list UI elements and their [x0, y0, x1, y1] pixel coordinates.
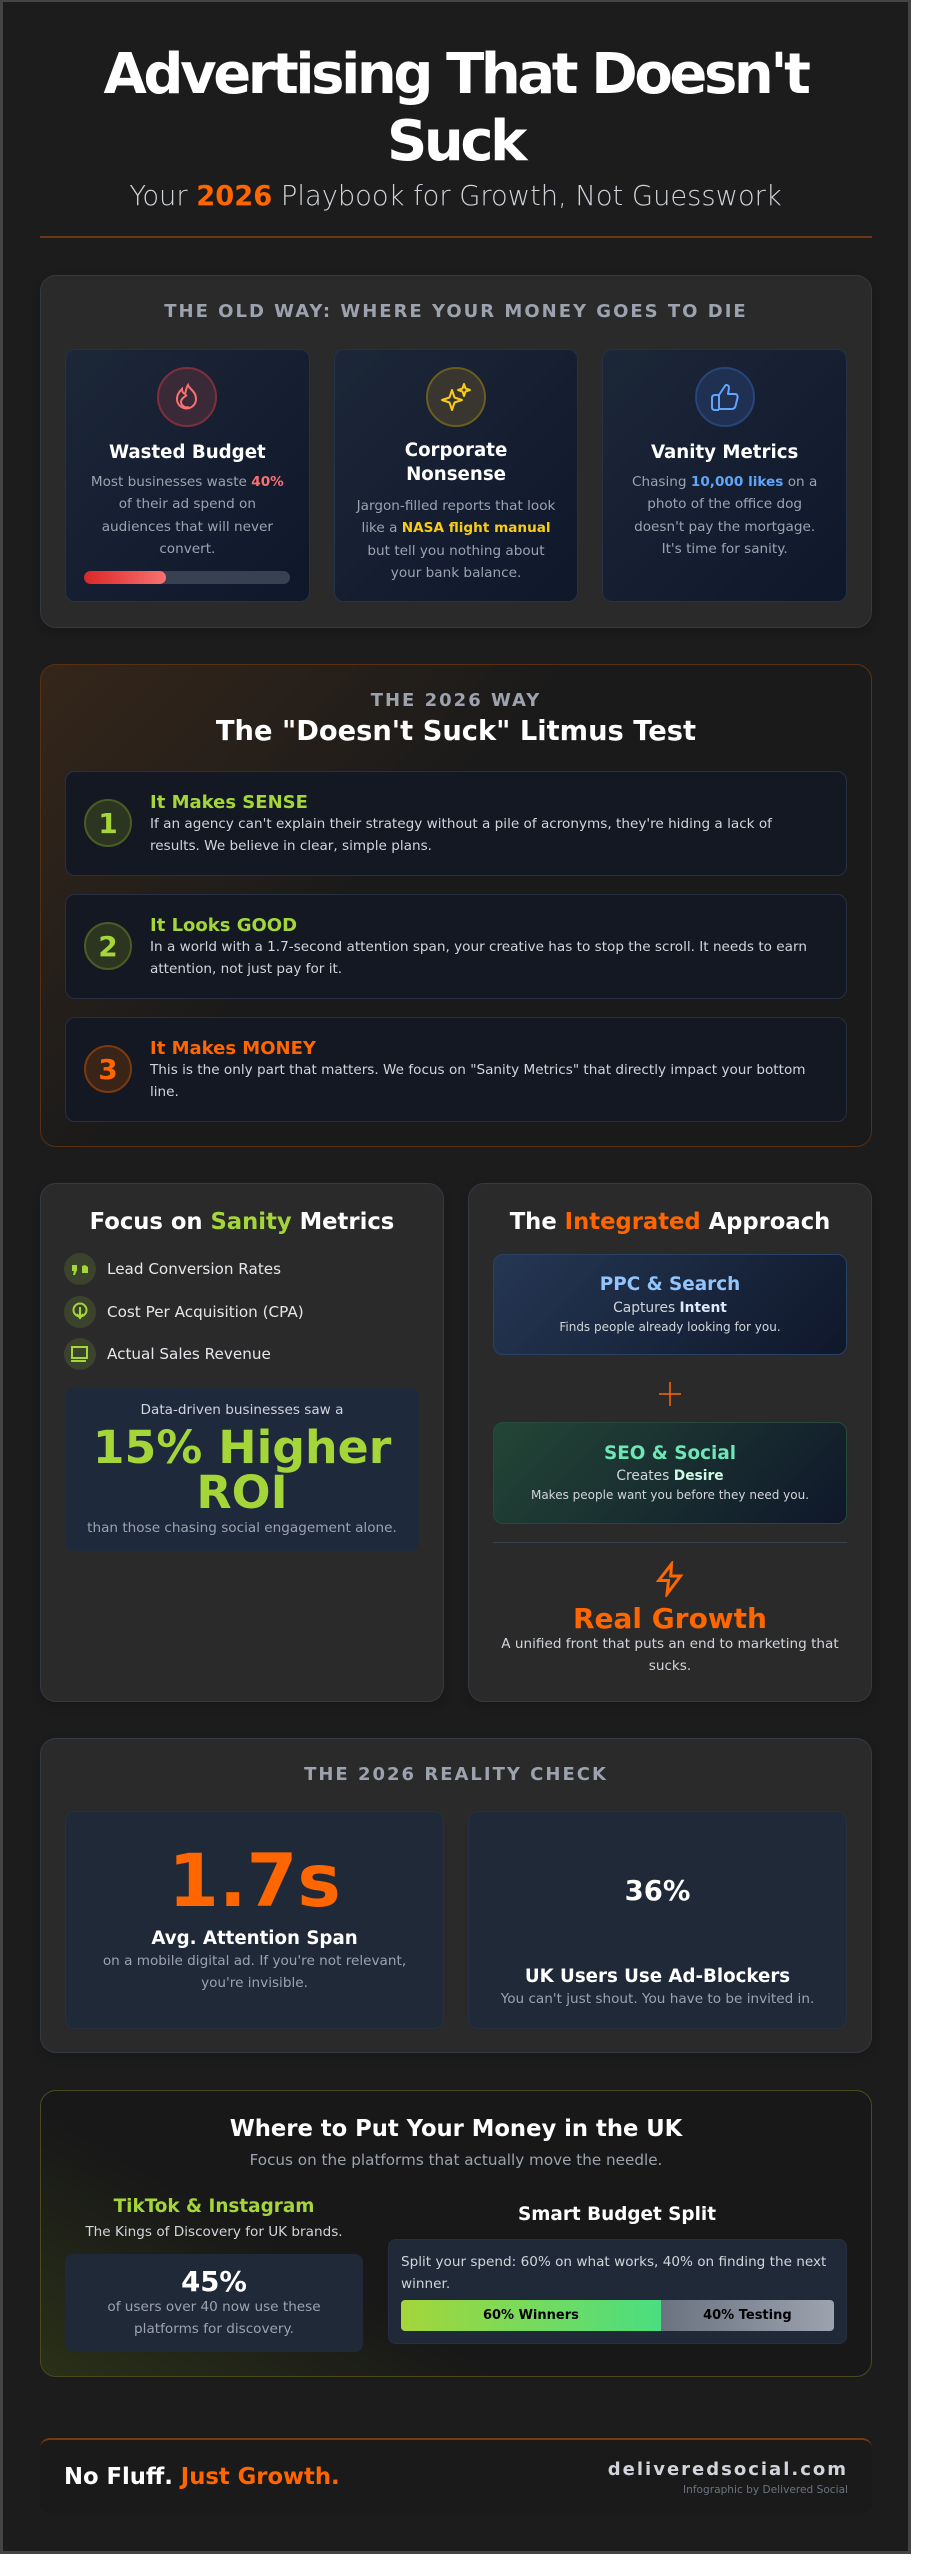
- website: deliveredsocial.com: [608, 2459, 848, 2480]
- integrated heading: The Integrated Approach: [510, 1209, 830, 1235]
- row: it looks good: [65, 894, 847, 999]
- sense text: If an agency can't explain their strategy without a pile of acronyms, they're hiding a lack of: [150, 816, 772, 832]
- 60% winners: [401, 2300, 661, 2331]
- progress bar 40%: [84, 571, 290, 584]
- icon: fire: [157, 367, 217, 427]
- number 1: 1: [98, 807, 118, 840]
- money text: [150, 1062, 806, 1100]
- 45% text: platforms for discovery.: [134, 2320, 294, 2336]
- 40% testing: [661, 2300, 834, 2331]
- number 2: [84, 922, 132, 970]
- 45% text: of users over 40 now use these: [107, 2299, 321, 2315]
- subtitle: Your 2026 Playbook for Growth, Not Guesswork: [129, 181, 782, 212]
- roi stat: ROI: [196, 1465, 288, 1519]
- number 3: 3: [98, 1053, 118, 1086]
- stacked bar 60/40: [401, 2300, 834, 2331]
- sense title: It Makes SENSE: [150, 792, 308, 813]
- icon: sales revenue: [64, 1338, 96, 1370]
- uk subheading: Focus on the platforms that actually move the needle.: [250, 2151, 662, 2169]
- budget text: winner.: [401, 2276, 450, 2292]
- card: vanity metrics: [602, 349, 847, 602]
- box: ppc and search: [493, 1254, 847, 1355]
- corporate nonsense text: but tell you nothing about: [367, 543, 545, 559]
- panel: the old way: [40, 275, 872, 628]
- sense text: results. We believe in clear, simple plans.: [150, 838, 432, 854]
- attention text: you're invisible.: [201, 1974, 308, 1990]
- litmus test heading: The "Doesn't Suck" Litmus Test: [216, 716, 696, 747]
- tiktok and instagram title: TikTok & Instagram: [114, 2196, 314, 2217]
- real growth text: [501, 1636, 839, 1674]
- vanity metrics text: It's time for sanity.: [662, 541, 788, 557]
- real growth text: A unified front that puts an end to marketing that: [501, 1636, 839, 1652]
- reality check heading: THE 2026 REALITY CHECK: [304, 1764, 608, 1785]
- metric: lead conversion: Lead Conversion Rates: [107, 1260, 281, 1278]
- budget text: [401, 2254, 826, 2292]
- good title: It Looks GOOD: [150, 915, 297, 936]
- icon: plus: [659, 1382, 681, 1406]
- uk heading: Where to Put Your Money in the UK: [230, 2116, 682, 2142]
- title: Suck: [387, 109, 524, 174]
- wasted budget text: audiences that will never: [102, 519, 273, 535]
- divider: [493, 1542, 847, 1543]
- icon: lightning bolt: [656, 1561, 684, 1597]
- title: [103, 42, 810, 174]
- wasted budget text: of their ad spend on: [119, 496, 256, 512]
- real growth title: Real Growth: [573, 1602, 767, 1635]
- money title: It Makes MONEY: [150, 1038, 316, 1059]
- wasted budget title: Wasted Budget: [109, 442, 266, 463]
- good text: In a world with a 1.7-second attention span, your creative has to stop the scroll. It needs to earn: [150, 939, 807, 955]
- footer: [40, 2438, 872, 2513]
- stat 36%: 36%: [625, 1875, 690, 1907]
- ad-blockers text: You can't just shout. You have to be invited in.: [501, 1991, 814, 2007]
- number 1: [84, 799, 132, 847]
- 40% testing: 40% Testing: [703, 2308, 792, 2323]
- money text: line.: [150, 1084, 179, 1100]
- panel: sanity metrics: [40, 1183, 444, 1702]
- number 3: [84, 1045, 132, 1093]
- vanity metrics text: [632, 474, 817, 557]
- corporate nonsense text: like a NASA flight manual: [361, 520, 551, 536]
- attention text: on a mobile digital ad. If you're not relevant,: [103, 1953, 406, 1969]
- corporate nonsense title: Corporate: [405, 440, 507, 461]
- panel: reality check: [40, 1738, 872, 2053]
- card: attention span: [65, 1811, 444, 2029]
- stat 1.7s: 1.7s: [168, 1839, 341, 1924]
- attention title: Avg. Attention Span: [151, 1928, 358, 1949]
- sense text: [150, 816, 772, 854]
- roi stat: [93, 1420, 392, 1519]
- panel: where to put your money: [40, 2090, 872, 2377]
- icon: thumbs up: [695, 367, 755, 427]
- box: budget split: [388, 2239, 847, 2344]
- stat 45%: 45%: [181, 2266, 247, 2298]
- vanity metrics title: Vanity Metrics: [651, 442, 798, 463]
- good text: attention, not just pay for it.: [150, 960, 342, 976]
- wasted budget text: Most businesses waste 40%: [91, 474, 284, 490]
- corporate nonsense text: your bank balance.: [391, 565, 521, 581]
- smart budget split title: Smart Budget Split: [518, 2204, 716, 2225]
- sanity metrics heading: Focus on Sanity Metrics: [90, 1209, 394, 1235]
- icon: cost per acquisition: [64, 1296, 96, 1328]
- panel: integrated approach: [468, 1183, 872, 1702]
- box: seo and social: [493, 1422, 847, 1524]
- budget text: Split your spend: 60% on what works, 40% on finding the next: [401, 2254, 826, 2270]
- panel: the 2026 way: [40, 664, 872, 1147]
- vanity metrics text: Chasing 10,000 likes on a: [632, 474, 817, 490]
- icon: sparkles: [426, 367, 486, 427]
- real growth text: sucks.: [649, 1658, 691, 1674]
- corporate nonsense title: [405, 440, 507, 485]
- wasted budget text: convert.: [159, 541, 215, 557]
- credit: Infographic by Delivered Social: [683, 2484, 848, 2496]
- card: corporate nonsense: [334, 349, 578, 602]
- corporate nonsense text: Jargon-filled reports that look: [357, 498, 555, 514]
- metric: sales revenue: Actual Sales Revenue: [107, 1345, 271, 1363]
- tiktok text: The Kings of Discovery for UK brands.: [85, 2224, 343, 2240]
- seo subtitle: Creates Desire: [616, 1468, 724, 1484]
- row: it makes money: [65, 1017, 847, 1122]
- callout: roi: [65, 1388, 419, 1551]
- money text: This is the only part that matters. We focus on "Sanity Metrics" that directly impact your bottom: [150, 1062, 806, 1078]
- roi lead-in: Data-driven businesses saw a: [141, 1402, 343, 1418]
- attention text: [103, 1953, 406, 1990]
- 60% winners: 60% Winners: [483, 2308, 579, 2323]
- 45% text: [107, 2299, 321, 2336]
- good text: [150, 939, 807, 976]
- vanity metrics text: photo of the office dog: [647, 496, 802, 512]
- roi stat: 15% Higher: [93, 1420, 391, 1474]
- seo text: Makes people want you before they need you.: [531, 1488, 809, 1502]
- seo title: SEO & Social: [604, 1443, 736, 1464]
- ppc subtitle: Captures Intent: [613, 1300, 727, 1316]
- metric: cost per acquisition: Cost Per Acquisition (CPA): [107, 1303, 304, 1321]
- 2026 way eyebrow: THE 2026 WAY: [371, 690, 541, 711]
- callout: 45%: [65, 2254, 363, 2352]
- number 2: 2: [98, 930, 118, 963]
- row: it makes sense: [65, 771, 847, 876]
- card: ad-blockers: [468, 1811, 847, 2029]
- vanity metrics text: doesn't pay the mortgage.: [634, 519, 815, 535]
- header divider: [40, 236, 872, 238]
- ppc text: Finds people already looking for you.: [559, 1320, 781, 1334]
- title: Advertising That Doesn't: [103, 42, 808, 107]
- ad-blockers title: UK Users Use Ad-Blockers: [525, 1966, 790, 1987]
- ppc title: PPC & Search: [600, 1274, 740, 1295]
- corporate nonsense title: Nonsense: [406, 464, 506, 485]
- wasted budget text: [91, 474, 284, 557]
- old way heading: THE OLD WAY: WHERE YOUR MONEY GOES TO DIE: [164, 301, 748, 322]
- corporate nonsense text: [356, 498, 556, 581]
- roi note: than those chasing social engagement alone.: [87, 1520, 397, 1536]
- card: wasted budget: [65, 349, 310, 602]
- icon: lead conversion: [64, 1253, 96, 1285]
- tagline: No Fluff. Just Growth.: [64, 2464, 340, 2490]
